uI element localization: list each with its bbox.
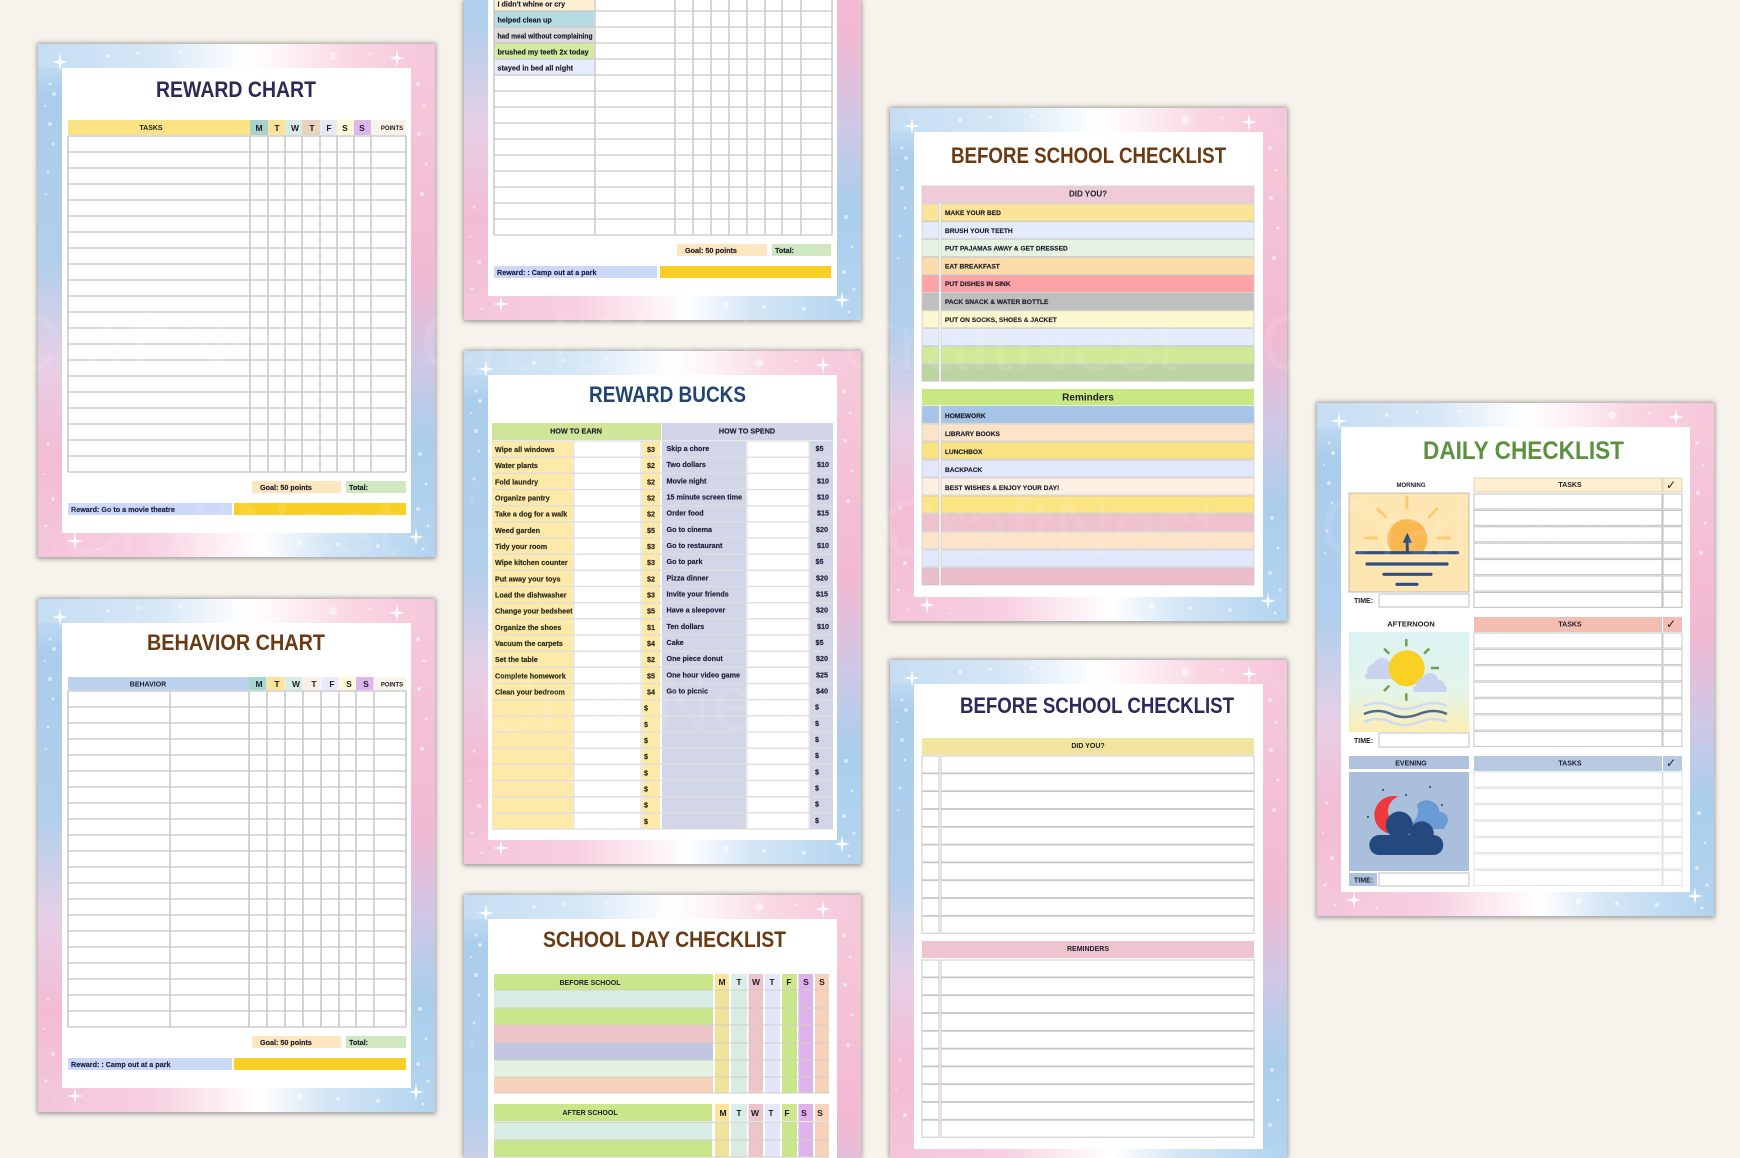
did you items: PUT PAJAMAS AWAY & GET DRESSED (945, 246, 1068, 253)
spend prices: $ (815, 719, 819, 728)
reminder items: BEST WISHES & ENJOY YOUR DAY! (945, 485, 1059, 492)
earn prices: $ (644, 784, 648, 794)
page frame (463, 0, 862, 322)
spend prices: $5 (816, 557, 824, 566)
table header: behavior and days: M (255, 679, 263, 689)
panel: daily checklist (1316, 402, 1715, 918)
watermark: CraftNest (1300, 108, 1638, 197)
earn prices: $ (644, 768, 648, 777)
title: before school checklist: BEFORE SCHOOL CHECKLIST (960, 693, 1234, 718)
earn prices: $3 (647, 445, 655, 454)
table header: behavior and days: T (311, 679, 317, 689)
table header: tasks and days: S (359, 123, 365, 133)
after school header: F (784, 1108, 790, 1118)
panel: behavior chart (37, 598, 436, 1114)
table header: behavior and days: S (363, 679, 369, 689)
spend reward list: Invite your friends (666, 590, 729, 598)
reminder items: HOMEWORK (945, 413, 986, 420)
evening tasks header: ✓ (1666, 756, 1676, 770)
reward label (68, 1058, 232, 1070)
evening tasks header (1474, 756, 1682, 771)
before school rows (494, 990, 829, 1093)
did you items: BRUSH YOUR TEETH (945, 228, 1013, 235)
morning tasks header (1474, 478, 1682, 492)
earn task list: Put away your toys (495, 574, 561, 583)
spend reward list: Go to restaurant (666, 541, 723, 550)
spend prices: $10 (817, 476, 829, 485)
earn task list: Wipe kitchen counter (495, 558, 568, 567)
before school header: BEFORE SCHOOL (559, 980, 621, 987)
after school rows (494, 1122, 829, 1157)
earn prices: $2 (647, 494, 655, 502)
before school header: S (803, 977, 809, 987)
earn task list: Water plants (495, 461, 538, 470)
reward label: Reward: : Camp out at a park (497, 268, 596, 277)
table header: tasks and days: F (326, 123, 332, 133)
did you header (922, 186, 1254, 203)
watermark: CraftNest (480, 658, 818, 747)
afternoon time field: TIME: (1354, 738, 1373, 745)
morning time field: TIME: (1354, 598, 1373, 605)
did you header: DID YOU? (1069, 190, 1107, 198)
earn task list: Clean your bedroom (495, 688, 565, 696)
earn prices: $3 (647, 558, 655, 567)
spend prices: $ (815, 751, 819, 760)
earn prices: $5 (647, 526, 655, 535)
table header: behavior and days (68, 677, 406, 690)
earn prices: $2 (647, 461, 655, 470)
earn task list: Complete homework (495, 671, 566, 680)
spend reward list: Pizza dinner (666, 573, 709, 582)
spend reward list: One piece donut (666, 654, 723, 663)
spend reward list: Ten dollars (666, 622, 704, 631)
evening label (1349, 756, 1469, 769)
icon: midday sun over water (1349, 632, 1469, 732)
total box (346, 481, 406, 493)
after school header (494, 1104, 829, 1121)
total box: Total: (775, 246, 794, 255)
panel: before school checklist (filled) (889, 107, 1288, 623)
earn prices: $ (644, 752, 648, 761)
watermark: CraftNest (60, 483, 398, 572)
afternoon tasks header: TASKS (1558, 622, 1582, 628)
spend prices: $15 (816, 590, 828, 598)
before school header: S (819, 977, 825, 987)
spend reward list: Movie night (666, 476, 707, 485)
reminder items: LUNCHBOX (945, 449, 983, 456)
morning tasks header: TASKS (1558, 482, 1582, 489)
watermark: CraftNest (0, 298, 338, 387)
earn task list: Fold laundry (495, 477, 538, 486)
did you header: DID YOU? (1071, 743, 1105, 750)
earn prices: $2 (647, 510, 655, 519)
earn prices: $ (644, 720, 648, 729)
table header: behavior and days: T (274, 679, 280, 689)
spend prices: $20 (816, 573, 828, 582)
spend reward list: Go to picnic (666, 686, 708, 696)
afternoon time field (1354, 733, 1469, 747)
spend prices: $10 (817, 460, 829, 469)
earn prices: $5 (647, 671, 655, 680)
reward bar (234, 503, 406, 515)
after school header: T (768, 1108, 774, 1118)
earn prices: $ (644, 817, 648, 826)
evening tasks header: TASKS (1558, 760, 1582, 768)
panel: school day checklist (463, 894, 862, 1158)
spend reward list: 15 minute screen time (666, 492, 742, 502)
earn prices: $2 (647, 477, 655, 486)
spend prices: $20 (816, 525, 828, 534)
afternoon tasks header: ✓ (1666, 617, 1676, 631)
goal box: Goal: 50 points (260, 1038, 312, 1047)
reminders rows (922, 406, 1254, 585)
spend reward list: Two dollars (666, 460, 706, 469)
spend prices: $ (815, 767, 819, 776)
after school header: S (817, 1108, 823, 1118)
morning label: MORNING (1396, 483, 1426, 489)
did you items: PUT DISHES IN SINK (945, 281, 1011, 288)
before school header: T (769, 977, 775, 987)
behavior labels: brushed my teeth 2x today (498, 48, 589, 56)
afternoon tasks header (1474, 617, 1682, 632)
title: school day checklist: SCHOOL DAY CHECKLIST (543, 927, 786, 952)
earn prices: $ (644, 736, 648, 745)
earn prices: $3 (647, 542, 655, 551)
watermark: CraftNest (1260, 298, 1598, 387)
before school header: T (736, 977, 742, 987)
spend reward list: Order food (666, 509, 704, 518)
total box: Total: (349, 1038, 368, 1047)
panel: reward bucks (463, 350, 862, 866)
earn prices: $4 (647, 688, 655, 696)
earn task list: Tidy your room (495, 542, 547, 551)
earn task list: Take a dog for a walk (495, 510, 567, 519)
table header: behavior and days: BEHAVIOR (130, 682, 166, 688)
reward label (494, 266, 657, 278)
did you rows (922, 204, 1254, 381)
spend reward list: One hour video game (666, 670, 740, 679)
earn prices: $1 (647, 623, 655, 632)
did you items: EAT BREAKFAST (945, 263, 1000, 270)
before school header: W (752, 977, 761, 987)
after school header: AFTER SCHOOL (562, 1110, 618, 1117)
earn prices: $3 (647, 590, 655, 600)
total box (772, 244, 831, 256)
spend prices: $ (815, 800, 819, 809)
reward bar (234, 1058, 406, 1070)
table header: behavior and days: S (346, 679, 352, 689)
watermark: CraftNest (1320, 483, 1658, 572)
earn prices: $ (644, 704, 648, 713)
how to spend header (662, 423, 833, 440)
spend prices: $40 (816, 686, 828, 696)
title: reward chart: REWARD CHART (156, 77, 316, 102)
reminders header: Reminders (1062, 392, 1114, 404)
table header: tasks and days: M (255, 123, 263, 133)
before school header: F (786, 977, 792, 987)
before school header: M (718, 977, 726, 987)
earn prices: $5 (647, 607, 655, 616)
reward label: Reward: Go to a movie theatre (71, 505, 175, 514)
morning task rows (1474, 494, 1682, 607)
watermark: CraftNest (420, 298, 758, 387)
earn task list: Wipe all windows (495, 445, 554, 454)
did you items: PUT ON SOCKS, SHOES & JACKET (945, 317, 1057, 324)
icon: moon and clouds (1349, 772, 1469, 871)
evening time field (1349, 873, 1469, 886)
afternoon task rows (1474, 633, 1682, 746)
behavior labels: helped clean up (498, 16, 552, 24)
reminder items: LIBRARY BOOKS (945, 431, 1001, 438)
goal box: Goal: 50 points (685, 246, 737, 255)
before school header (494, 974, 829, 990)
spend prices: $5 (816, 444, 824, 453)
reward label (68, 503, 232, 515)
earn task list: Weed garden (495, 526, 540, 535)
watermark: CraftNest (840, 298, 1178, 387)
panel: behavior list (cropped at top) (463, 0, 862, 322)
table header: tasks and days: S (342, 123, 348, 133)
after school header: T (736, 1108, 742, 1118)
earn prices: $ (644, 801, 648, 810)
spend prices: $10 (817, 492, 829, 502)
spend prices: $5 (816, 638, 824, 647)
table header: behavior and days: POINTS (381, 682, 403, 688)
earn task list: Set the table (495, 655, 538, 664)
page frame (463, 894, 862, 1158)
table header: behavior and days: W (292, 679, 301, 689)
spend reward list: Skip a chore (666, 444, 709, 453)
spend prices: $10 (817, 622, 829, 631)
afternoon label: AFTERNOON (1387, 620, 1435, 628)
earn task list: Load the dishwasher (495, 590, 567, 600)
after school header: M (719, 1108, 727, 1118)
title: before school checklist: BEFORE SCHOOL CHECKLIST (951, 143, 1226, 168)
did you rows (922, 756, 1254, 933)
behavior labels: stayed in bed all night (498, 64, 574, 72)
spend prices: $ (815, 816, 819, 825)
table header: tasks and days: T (309, 123, 315, 133)
earn prices: $2 (647, 574, 655, 583)
after school header: W (751, 1108, 760, 1118)
how to spend header: HOW TO SPEND (719, 426, 775, 436)
table header: tasks and days (68, 120, 406, 135)
how to earn header: HOW TO EARN (550, 426, 602, 436)
reminders header (922, 941, 1254, 958)
behavior grid (68, 691, 406, 1027)
spend prices: $20 (816, 654, 828, 663)
evening label: EVENING (1395, 760, 1427, 768)
earn task list: Vacuum the carpets (495, 639, 563, 648)
spend reward list: Have a sleepover (666, 606, 725, 615)
earn task list: Organize the shoes (495, 623, 561, 632)
did you items: MAKE YOUR BED (945, 210, 1001, 217)
evening task rows (1474, 772, 1682, 885)
table header: tasks and days: TASKS (139, 125, 163, 132)
title: daily checklist: DAILY CHECKLIST (1423, 437, 1624, 465)
spend reward list: Go to park (666, 557, 702, 566)
goal box: Goal: 50 points (260, 483, 312, 492)
reward label: Reward: : Camp out at a park (71, 1060, 170, 1069)
spend prices: $25 (816, 670, 828, 679)
table header: tasks and days: POINTS (381, 126, 403, 132)
table cells (492, 441, 833, 829)
spend reward list: Cake (666, 638, 684, 647)
spend prices: $ (815, 703, 819, 712)
reminder items: BACKPACK (945, 467, 982, 474)
spend prices: $20 (816, 606, 828, 615)
reminders rows (922, 960, 1254, 1137)
earn task list: Organize pantry (495, 494, 550, 502)
table header: behavior and days: F (329, 679, 335, 689)
how to earn header (492, 423, 661, 440)
total box: Total: (349, 483, 368, 492)
title: reward bucks: REWARD BUCKS (589, 382, 746, 407)
behavior grid (494, 0, 832, 235)
page frame (889, 659, 1288, 1158)
morning tasks header: ✓ (1666, 478, 1676, 492)
did you header (922, 738, 1254, 755)
reward bar (660, 266, 831, 278)
behavior labels: had meal without complaining (498, 32, 592, 40)
morning time field (1354, 594, 1469, 607)
table header: tasks and days: T (274, 123, 280, 133)
icon: sunrise (1349, 493, 1469, 592)
after school header: S (801, 1108, 807, 1118)
spend prices: $10 (817, 541, 829, 550)
spend reward list: Go to cinema (666, 525, 713, 534)
title: behavior chart: BEHAVIOR CHART (147, 630, 326, 655)
behavior labels (494, 0, 594, 75)
spend prices: $ (815, 784, 819, 792)
total box (346, 1036, 406, 1048)
evening time field: TIME: (1354, 878, 1373, 884)
table header: tasks and days: W (291, 123, 300, 133)
panel: before school checklist (blank) (889, 659, 1288, 1158)
panel: reward chart (37, 43, 436, 559)
earn task list: Change your bedsheet (495, 607, 573, 616)
spend prices: $ (815, 735, 819, 744)
task grid (68, 136, 406, 472)
earn prices: $2 (647, 655, 655, 664)
did you items: PACK SNACK & WATER BOTTLE (945, 299, 1049, 306)
reminders header: REMINDERS (1067, 946, 1109, 953)
watermark: CraftNest (880, 483, 1218, 572)
reminders header (922, 389, 1254, 405)
goal box (252, 481, 341, 493)
earn prices: $4 (647, 639, 655, 648)
goal box (252, 1036, 341, 1048)
watermark (0, 108, 1658, 747)
goal box (677, 244, 767, 256)
spend prices: $15 (817, 509, 829, 518)
